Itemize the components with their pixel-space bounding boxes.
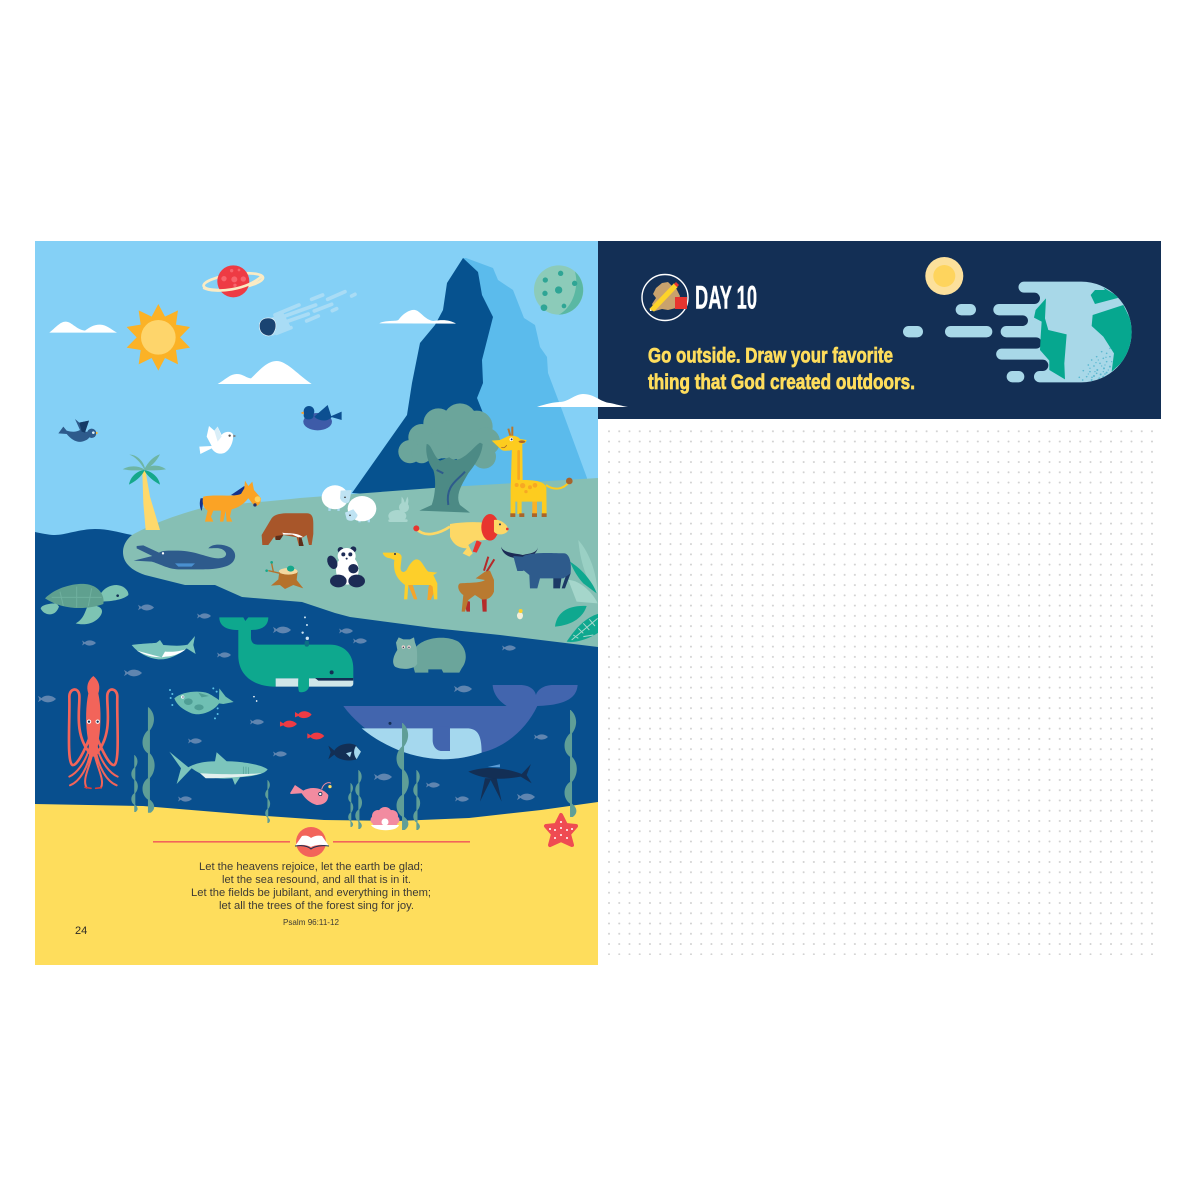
donkey xyxy=(200,481,261,522)
bird: white dove xyxy=(199,426,236,454)
tropical leaves xyxy=(555,540,600,642)
clam with pearl xyxy=(370,807,400,830)
starfish xyxy=(546,815,576,845)
sheep pair xyxy=(322,485,376,522)
book spread xyxy=(35,241,1161,965)
chick xyxy=(517,609,523,619)
crocodile xyxy=(134,545,235,569)
land xyxy=(123,478,598,647)
antelope xyxy=(458,557,494,612)
activity prompt: thing that God created outdoors. xyxy=(648,371,915,394)
icon: banner sun xyxy=(925,257,963,295)
day title: DAY 10 xyxy=(695,280,757,316)
mountain: light side xyxy=(461,258,587,486)
panel: day header banner xyxy=(598,241,1161,419)
verse divider right line xyxy=(333,841,470,843)
red fish trio xyxy=(280,711,324,739)
panda xyxy=(325,546,365,587)
cow xyxy=(262,513,313,546)
puffer fish xyxy=(169,687,257,719)
verse divider left line xyxy=(153,841,290,843)
panel: left illustrated page xyxy=(35,241,600,965)
icon: ringed red planet xyxy=(203,265,264,297)
activity prompt: Go outside. Draw your favorite xyxy=(648,344,893,368)
icon: open bible xyxy=(295,827,329,857)
cloud: left xyxy=(49,322,117,333)
icon: green moon xyxy=(534,265,583,315)
tree stump with frog xyxy=(265,561,303,589)
icon: sun xyxy=(127,304,190,371)
dark fish xyxy=(328,744,361,760)
bird: dark blue left xyxy=(58,419,98,442)
sky background xyxy=(35,241,598,541)
icon: comet xyxy=(259,292,355,336)
dot grid drawing area xyxy=(607,429,1153,955)
camel xyxy=(383,553,437,600)
verse citation: Psalm 96:11-12 xyxy=(283,917,339,927)
lion xyxy=(413,514,509,557)
icon: speeding earth xyxy=(903,282,1137,382)
palm tree xyxy=(123,454,166,530)
turtle xyxy=(41,584,128,624)
hippo xyxy=(393,637,466,673)
banner background xyxy=(598,241,1161,419)
mountain: dark side xyxy=(352,258,493,500)
giraffe xyxy=(492,427,573,517)
rabbit xyxy=(388,497,409,522)
bird: blue right xyxy=(301,405,342,430)
shark: small xyxy=(132,636,196,659)
cloud: middle xyxy=(218,361,312,384)
whale: blue xyxy=(343,685,578,759)
whale: green xyxy=(219,616,353,692)
sea xyxy=(35,529,598,830)
shark: large xyxy=(169,752,268,785)
activity prompt xyxy=(648,344,915,394)
cloud: on mountain xyxy=(379,310,456,324)
anglerfish xyxy=(290,783,332,805)
verse text xyxy=(191,861,431,912)
verse text: Let the heavens rejoice, let the earth be glad; xyxy=(199,861,423,873)
water buffalo xyxy=(501,546,571,588)
page number: 24 xyxy=(75,925,87,937)
squid xyxy=(69,676,118,788)
verse text: let all the trees of the forest sing for joy. xyxy=(219,900,414,912)
sand beach xyxy=(35,802,598,965)
flying fish xyxy=(468,764,532,802)
cloud: overlapping banner xyxy=(537,394,628,407)
tree xyxy=(398,403,500,513)
small fish school xyxy=(38,605,548,802)
verse text: Let the fields be jubilant, and everything in them; xyxy=(191,887,431,899)
seaweed xyxy=(131,707,577,830)
verse text: let the sea resound, and all that is in it. xyxy=(222,874,411,886)
icon: hand with pencil xyxy=(642,274,688,320)
